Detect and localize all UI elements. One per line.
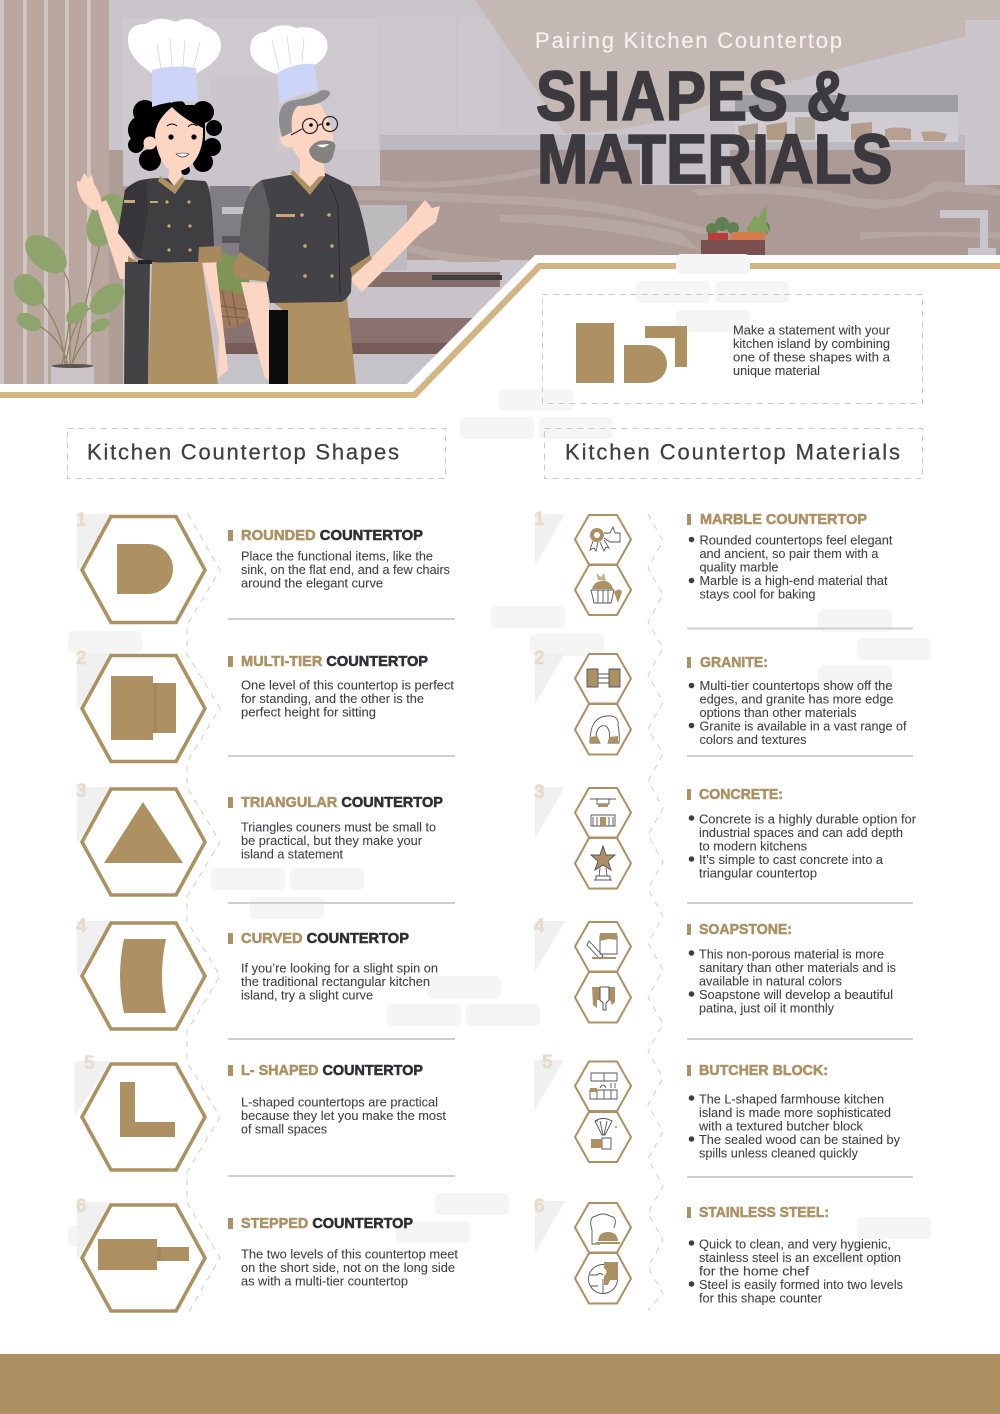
icon: chef hat and cloche <box>591 1214 620 1244</box>
icon: countertop shapes <box>576 323 687 383</box>
heading: concrete: CONCRETE: <box>699 787 783 803</box>
icon: star trophy <box>591 846 615 880</box>
body: butcher block: with a textured butcher block <box>698 1118 863 1134</box>
body: concrete: Concrete is a highly durable option for <box>699 812 917 826</box>
body: concrete <box>689 812 917 880</box>
plant <box>7 187 133 384</box>
body: multi-tier: for standing, and the other is the <box>241 691 424 706</box>
icon: rock arch <box>590 716 619 743</box>
basket of herbs <box>214 253 250 328</box>
chef man <box>232 25 440 384</box>
body: marble: Rounded countertops feel elegant <box>700 532 893 548</box>
shape row 6: stepped <box>76 1196 458 1311</box>
body: granite: colors and textures <box>700 732 807 747</box>
shape row 6: stepped: 6 <box>76 1196 87 1217</box>
shape row 2: multi-tier <box>76 648 455 762</box>
body: L-shaped: L-shaped countertops are practical <box>241 1094 438 1110</box>
heading: shapes: Kitchen Countertop Shapes <box>87 440 399 464</box>
icon: workshop <box>590 799 616 826</box>
body: concrete: industrial spaces and can add depth <box>699 825 903 840</box>
body: stainless steel: Quick to clean, and very hygienic, <box>699 1236 891 1252</box>
body: granite <box>689 678 907 747</box>
body: multi-tier <box>241 678 454 720</box>
panel: intro statement: kitchen island by combining <box>733 336 890 351</box>
body: granite: Multi-tier countertops show off the <box>700 678 892 693</box>
heading: materials <box>544 428 922 478</box>
body: granite: edges, and granite has more edge <box>700 692 894 706</box>
heading: multi-tier countertop: MULTI-TIER COUNTERTOP <box>241 654 428 670</box>
watermark placeholder blocks <box>68 254 931 1267</box>
body: stainless steel: stainless steel is an excellent option <box>699 1250 901 1265</box>
body: rounded: sink, on the flat end, and a few chairs <box>241 562 450 577</box>
heading: triangular countertop: TRIANGULAR COUNTERTOP <box>241 795 443 811</box>
material row 2: granite <box>534 648 913 757</box>
body: stainless steel: Steel is easily formed into two levels <box>699 1277 903 1292</box>
body: L-shaped: of small spaces <box>241 1122 327 1136</box>
material row 3: concrete <box>534 782 917 904</box>
icon: hand with whisk <box>591 1118 617 1149</box>
heading: marble: MARBLE COUNTERTOP <box>700 512 867 528</box>
body: curved <box>241 960 438 1002</box>
material row 1: marble <box>534 509 913 630</box>
material row 5: butcher block <box>534 1052 913 1178</box>
wood slat wall <box>0 0 123 400</box>
heading: rounded countertop: ROUNDED COUNTERTOP <box>241 528 423 544</box>
body: triangular: be practical, but they make your <box>241 833 423 848</box>
body: granite: Granite is available in a vast range of <box>700 718 907 734</box>
body: soapstone <box>689 946 896 1016</box>
material row 4: soapstone <box>534 916 913 1040</box>
icon: paint can and brush <box>587 933 617 959</box>
heading: shapes <box>68 428 446 478</box>
body: butcher block: island is made more sophisticated <box>699 1105 891 1120</box>
material row 1: marble: 1 <box>534 509 545 530</box>
shape row 5: L-shaped <box>75 1053 455 1177</box>
title: Pairing Kitchen Countertop <box>535 28 842 53</box>
shape row 4: curved: 4 <box>76 916 87 937</box>
heading: stainless steel: STAINLESS STEEL: <box>699 1205 829 1221</box>
body: rounded: Place the functional items, like the <box>241 548 433 564</box>
dashed zigzag connectors <box>187 514 663 1315</box>
body: curved: the traditional rectangular kitchen <box>241 974 430 989</box>
shape row 1: rounded: 1 <box>76 510 87 531</box>
footer band <box>0 1354 1000 1414</box>
body: curved: island, try a slight curve <box>241 988 373 1002</box>
heading: granite: GRANITE: <box>700 655 768 671</box>
title <box>535 28 893 198</box>
icon: paint roller drips <box>592 987 615 1010</box>
material row 5: butcher block: 5 <box>542 1052 553 1073</box>
body: L-shaped <box>241 1094 446 1136</box>
icon: multi-tier shape <box>111 676 176 740</box>
body: stepped <box>241 1246 458 1288</box>
heading: materials: Kitchen Countertop Materials <box>565 440 900 464</box>
body: stepped: as with a multi-tier countertop <box>241 1274 408 1288</box>
chef woman <box>77 19 228 384</box>
icon: triangle shape <box>104 802 183 863</box>
body: stainless steel: for this shape counter <box>699 1290 823 1306</box>
body: stainless steel <box>689 1236 903 1306</box>
body: L-shaped: because they let you make the most <box>241 1108 446 1123</box>
body: marble: and ancient, so pair them with a <box>700 546 879 561</box>
material row 6: stainless steel <box>534 1196 903 1306</box>
intro text: Make a statement with your <box>733 322 891 338</box>
body: soapstone: patina, just oil it monthly <box>699 1000 834 1016</box>
body: concrete: to modern kitchens <box>699 838 807 854</box>
body: marble <box>689 532 893 602</box>
body: butcher block: The L-shaped farmhouse kitchen <box>699 1092 884 1106</box>
body: stainless steel: for the home chef <box>699 1264 809 1278</box>
body: rounded: around the elegant curve <box>241 576 383 590</box>
shape row 5: L-shaped: 5 <box>84 1053 95 1074</box>
title: SHAPES & <box>536 57 850 135</box>
body: concrete: It’s simple to cast concrete into a <box>699 852 884 867</box>
body: butcher block <box>689 1092 900 1160</box>
shape row 3: triangular: 3 <box>76 781 87 802</box>
shape row 2: multi-tier: 2 <box>76 648 87 669</box>
heading: curved countertop: CURVED COUNTERTOP <box>241 931 409 947</box>
heading: butcher block: BUTCHER BLOCK: <box>699 1063 828 1079</box>
vegetable crate <box>701 204 770 256</box>
hero kitchen background <box>0 0 1000 400</box>
body: multi-tier: perfect height for sitting <box>241 704 376 720</box>
body: butcher block: The sealed wood can be stained by <box>699 1132 900 1147</box>
body: soapstone: Soapstone will develop a beautiful <box>699 987 893 1002</box>
body: soapstone: available in natural colors <box>699 974 842 988</box>
icon: cupcake <box>591 573 622 603</box>
body: marble: Marble is a high-end material that <box>700 573 888 588</box>
body: triangular <box>241 820 436 862</box>
icon: rounded shape <box>117 544 173 594</box>
heading: soapstone: SOAPSTONE: <box>699 922 792 938</box>
heading: stepped countertop: STEPPED COUNTERTOP <box>241 1216 413 1232</box>
material row 6: stainless steel: 6 <box>534 1196 545 1217</box>
shape row 4: curved <box>76 916 455 1040</box>
body: rounded <box>241 548 450 590</box>
body: soapstone: This non-porous material is more <box>699 946 884 962</box>
icon: L shape <box>120 1082 175 1137</box>
body: butcher block: spills unless cleaned quickly <box>699 1146 858 1160</box>
body: stepped: The two levels of this countertop meet <box>241 1246 458 1262</box>
heading: L-shaped countertop: L- SHAPED COUNTERTOP <box>241 1063 423 1079</box>
body: triangular: island a statement <box>241 846 343 862</box>
body: marble: stays cool for baking <box>700 586 816 602</box>
panel: intro statement: one of these shapes with a <box>733 350 891 364</box>
icon: table and chairs <box>587 669 620 687</box>
icon: kitchen units <box>590 1073 617 1099</box>
shape row 1: rounded <box>76 510 455 622</box>
icon: rosette thumb <box>590 527 620 551</box>
material row 4: soapstone: 4 <box>534 916 545 937</box>
icon: stepped shape <box>98 1239 189 1270</box>
body: concrete: triangular countertop <box>699 866 817 880</box>
material row 2: granite: 2 <box>534 648 545 669</box>
shape row 3: triangular <box>76 781 455 904</box>
panel: intro statement: unique material <box>733 363 820 378</box>
body: triangular: Triangles couners must be small to <box>241 820 436 834</box>
panel: intro statement <box>542 294 922 404</box>
body: stepped: on the short side, not on the long side <box>241 1260 455 1275</box>
body: granite: options than other materials <box>700 705 857 720</box>
title: MATERIALS <box>537 119 893 198</box>
icon: puzzle <box>588 1262 618 1294</box>
body: soapstone: sanitary than other materials and is <box>699 960 896 975</box>
icon: curved shape <box>120 939 166 1013</box>
material row 3: concrete: 3 <box>534 782 545 803</box>
body: curved: If you’re looking for a slight spin on <box>241 960 438 976</box>
body: multi-tier: One level of this countertop is perfect <box>241 678 454 692</box>
body: marble: quality marble <box>700 560 778 574</box>
